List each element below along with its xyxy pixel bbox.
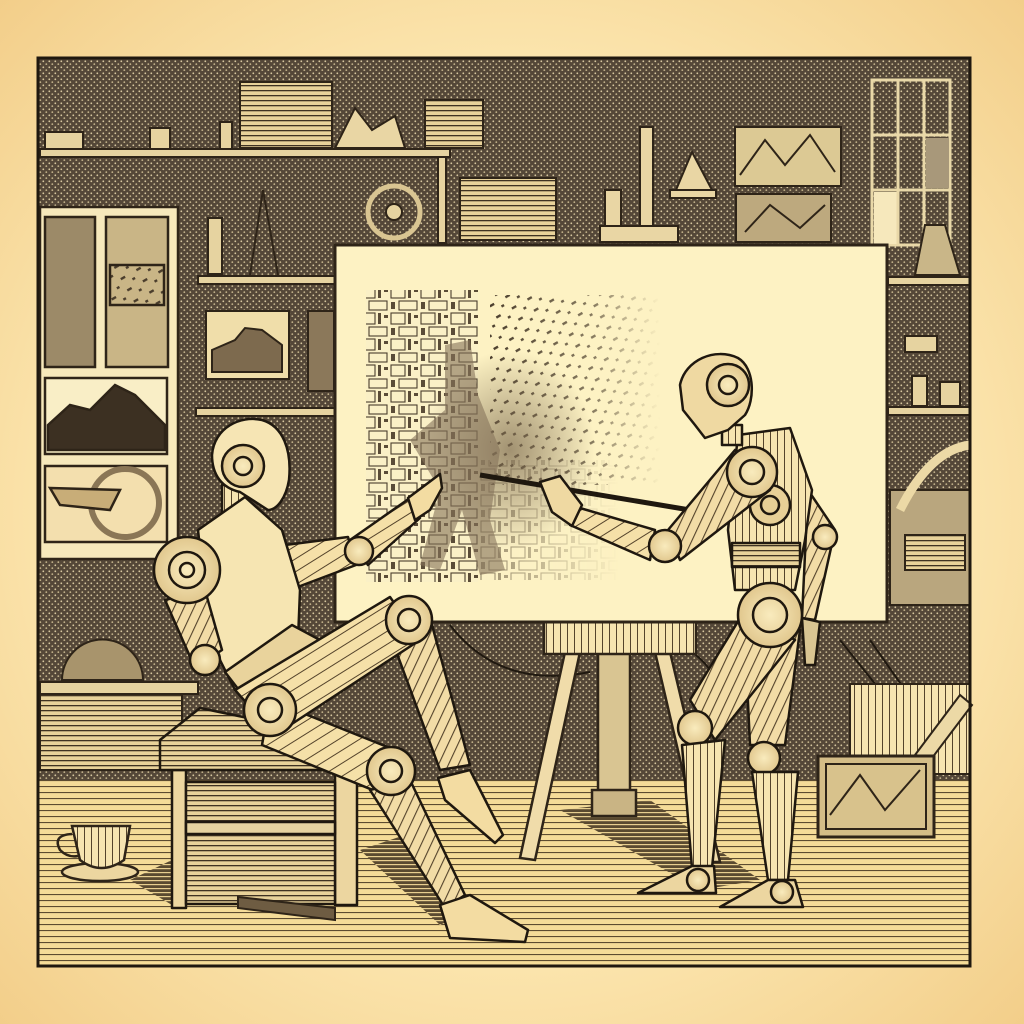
easel [520,622,720,862]
near arm [165,590,222,668]
table with bowl at left [40,640,198,770]
robot: standing, right [480,354,837,907]
stool [160,708,357,908]
front shin [392,625,470,770]
thigh [235,597,420,735]
crate and leaning picture, lower right [818,684,972,837]
wall with stipple shading [38,58,970,788]
robot: seated, left [154,419,528,942]
hip panel [225,625,320,720]
mosaic figure dissolving into marks [366,290,660,582]
far arm [802,490,835,620]
head [212,419,290,510]
front leg [690,610,795,740]
right side shelves [888,225,970,415]
torso [728,428,812,590]
machine on the right wall [890,445,970,605]
top centre books, wheel and lamp [368,127,716,242]
window, top right [872,80,950,245]
wires on wall [450,625,905,700]
picture frames, top right [735,127,841,242]
left wall posters [40,207,178,559]
canvas [335,245,887,622]
near arm [668,450,770,560]
brush [480,475,690,510]
neck [722,425,742,445]
neck [222,485,248,520]
floor with horizontal hatching [38,780,970,966]
head [680,354,752,438]
floor shadows [130,800,760,925]
tools on floor [238,897,335,920]
back leg [745,630,800,745]
top left shelf with stacked books [40,82,483,243]
middle shelves and small pictures [196,190,338,416]
back leg [262,700,395,795]
teacup on floor [58,826,138,881]
torso [198,497,300,690]
far arm [285,537,356,588]
hip joint [738,583,802,647]
